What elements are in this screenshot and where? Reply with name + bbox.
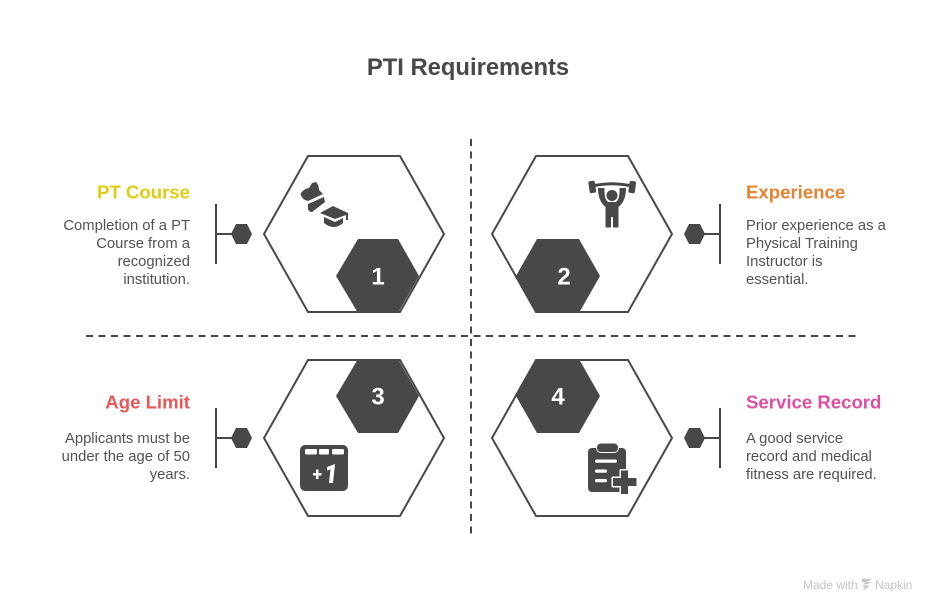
- text: Service Record description: fitness are required.: [746, 467, 877, 483]
- heading: Age Limit: Age Limit: [105, 392, 190, 412]
- text: Service Record description: record and medical: [746, 449, 872, 465]
- icon: weightlifter: [588, 181, 636, 228]
- panel: Age Limit: [62, 359, 444, 516]
- text: Age Limit description: Applicants must be: [65, 431, 190, 447]
- text: PT Course description: [63, 218, 191, 288]
- number hexagon 3: 3: [371, 384, 385, 410]
- number hexagon 3: [336, 359, 419, 433]
- text: Experience description: Instructor is: [746, 254, 822, 270]
- icon: diploma and graduation cap: [300, 182, 348, 227]
- number hexagon 4: 4: [551, 384, 565, 410]
- text: PT Course description: Course from a: [96, 236, 191, 252]
- outline hexagon 2: [492, 156, 672, 312]
- connector 1: [216, 204, 252, 264]
- text: Experience description: essential.: [746, 272, 809, 288]
- number hexagon 1: 1: [371, 264, 385, 290]
- watermark: Made with Napkin: [803, 578, 912, 592]
- text: Experience description: Prior experience as a: [746, 218, 887, 234]
- heading: Service Record: Service Record: [746, 392, 881, 412]
- watermark: Made with Napkin: Made with: [803, 578, 858, 592]
- icon: calendar plus one: [300, 445, 348, 491]
- panel: PT Course: [63, 156, 444, 313]
- outline hexagon 3: [264, 360, 444, 516]
- connector 3: [216, 408, 252, 468]
- number hexagon 1: [336, 239, 419, 313]
- text: Experience description: Physical Training: [746, 236, 858, 252]
- outline hexagon 1: [264, 156, 444, 312]
- text: Service Record description: [746, 431, 877, 483]
- outline hexagon 4: [492, 360, 672, 516]
- panel: Service Record: [492, 359, 881, 516]
- vertical dashed divider: [470, 139, 472, 534]
- heading: PT Course: PT Course: [97, 182, 190, 202]
- number hexagon 2: 2: [557, 264, 571, 290]
- connector 4: [684, 408, 720, 468]
- text: PT Course description: institution.: [123, 272, 190, 288]
- icon: clipboard with plus: [588, 444, 636, 494]
- connector 2: [684, 204, 720, 264]
- horizontal dashed divider: [86, 335, 856, 337]
- text: Age Limit description: [62, 431, 190, 483]
- number hexagon 4: [516, 359, 600, 433]
- number hexagon 2: [516, 239, 600, 313]
- title: PTI Requirements: [367, 54, 569, 81]
- text: Service Record description: A good service: [746, 431, 843, 447]
- text: Age Limit description: under the age of 50: [62, 449, 190, 465]
- heading: Experience: Experience: [746, 182, 845, 202]
- text: PT Course description: Completion of a PT: [63, 218, 190, 234]
- text: PT Course description: recognized: [118, 254, 190, 270]
- text: Experience description: [746, 218, 887, 288]
- watermark: Made with Napkin: Napkin: [875, 578, 912, 592]
- text: Age Limit description: years.: [150, 467, 190, 483]
- panel: Experience: [492, 156, 887, 313]
